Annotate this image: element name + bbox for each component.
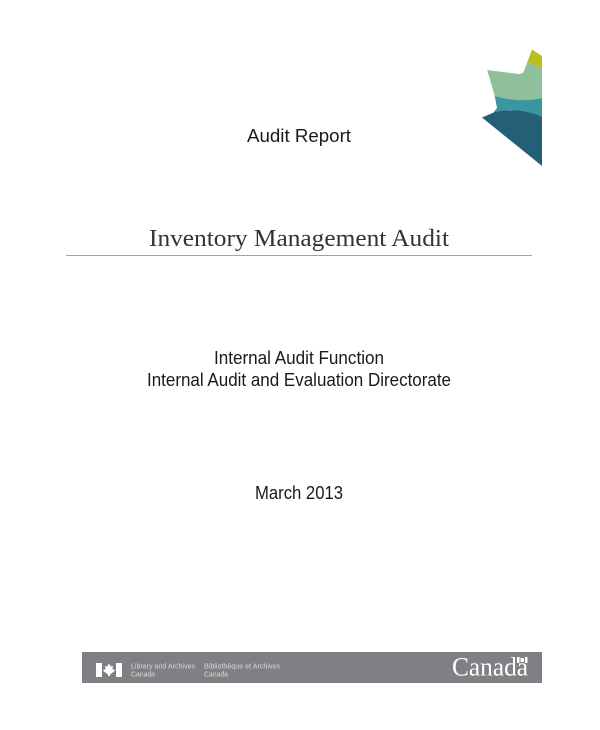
organization text: Internal Audit and Evaluation Directorate [147, 370, 451, 390]
date: March 2013 [255, 483, 343, 503]
institution names: Canada [131, 672, 155, 678]
institution names: Library and Archives [131, 664, 196, 670]
institution names: Bibliothèque et Archives [204, 664, 281, 670]
Canada wordmark: Canada [452, 652, 528, 682]
institution names [131, 664, 281, 678]
title: Inventory Management Audit [149, 226, 449, 252]
logo: maple leaf fragment [482, 50, 542, 166]
organization text: Internal Audit Function [214, 348, 384, 368]
report type heading: Audit Report [247, 126, 351, 146]
title rule [66, 255, 532, 256]
icon: Canadian flag [96, 663, 122, 677]
organization text [147, 348, 451, 390]
footer banner [82, 652, 542, 683]
institution names: Canada [204, 672, 228, 678]
